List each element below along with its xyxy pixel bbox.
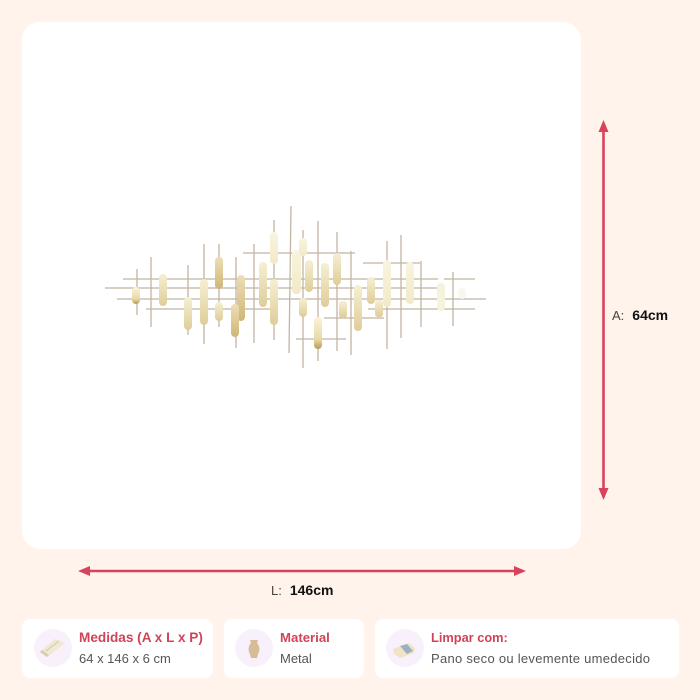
height label: A: 64cm xyxy=(612,307,668,323)
text: medidas value: 64 x 146 x 6 cm xyxy=(79,651,171,666)
height arrow xyxy=(598,120,608,500)
width arrow xyxy=(78,566,526,576)
heading: material: Material xyxy=(280,630,330,645)
text: material value: Metal xyxy=(280,651,312,666)
heading: medidas: Medidas (A x L x P) xyxy=(79,630,203,645)
heading: limpar: Limpar com: xyxy=(431,630,508,645)
card: material xyxy=(224,619,364,678)
icon: vase xyxy=(235,629,273,667)
product panel xyxy=(22,22,581,549)
card: medidas xyxy=(22,619,213,678)
width label: L: 146cm xyxy=(271,582,333,598)
text: limpar value: Pano seco ou levemente umedecido xyxy=(431,651,650,666)
icon: cloth xyxy=(386,629,424,667)
card: limpeza xyxy=(375,619,679,678)
icon: plank xyxy=(34,629,72,667)
